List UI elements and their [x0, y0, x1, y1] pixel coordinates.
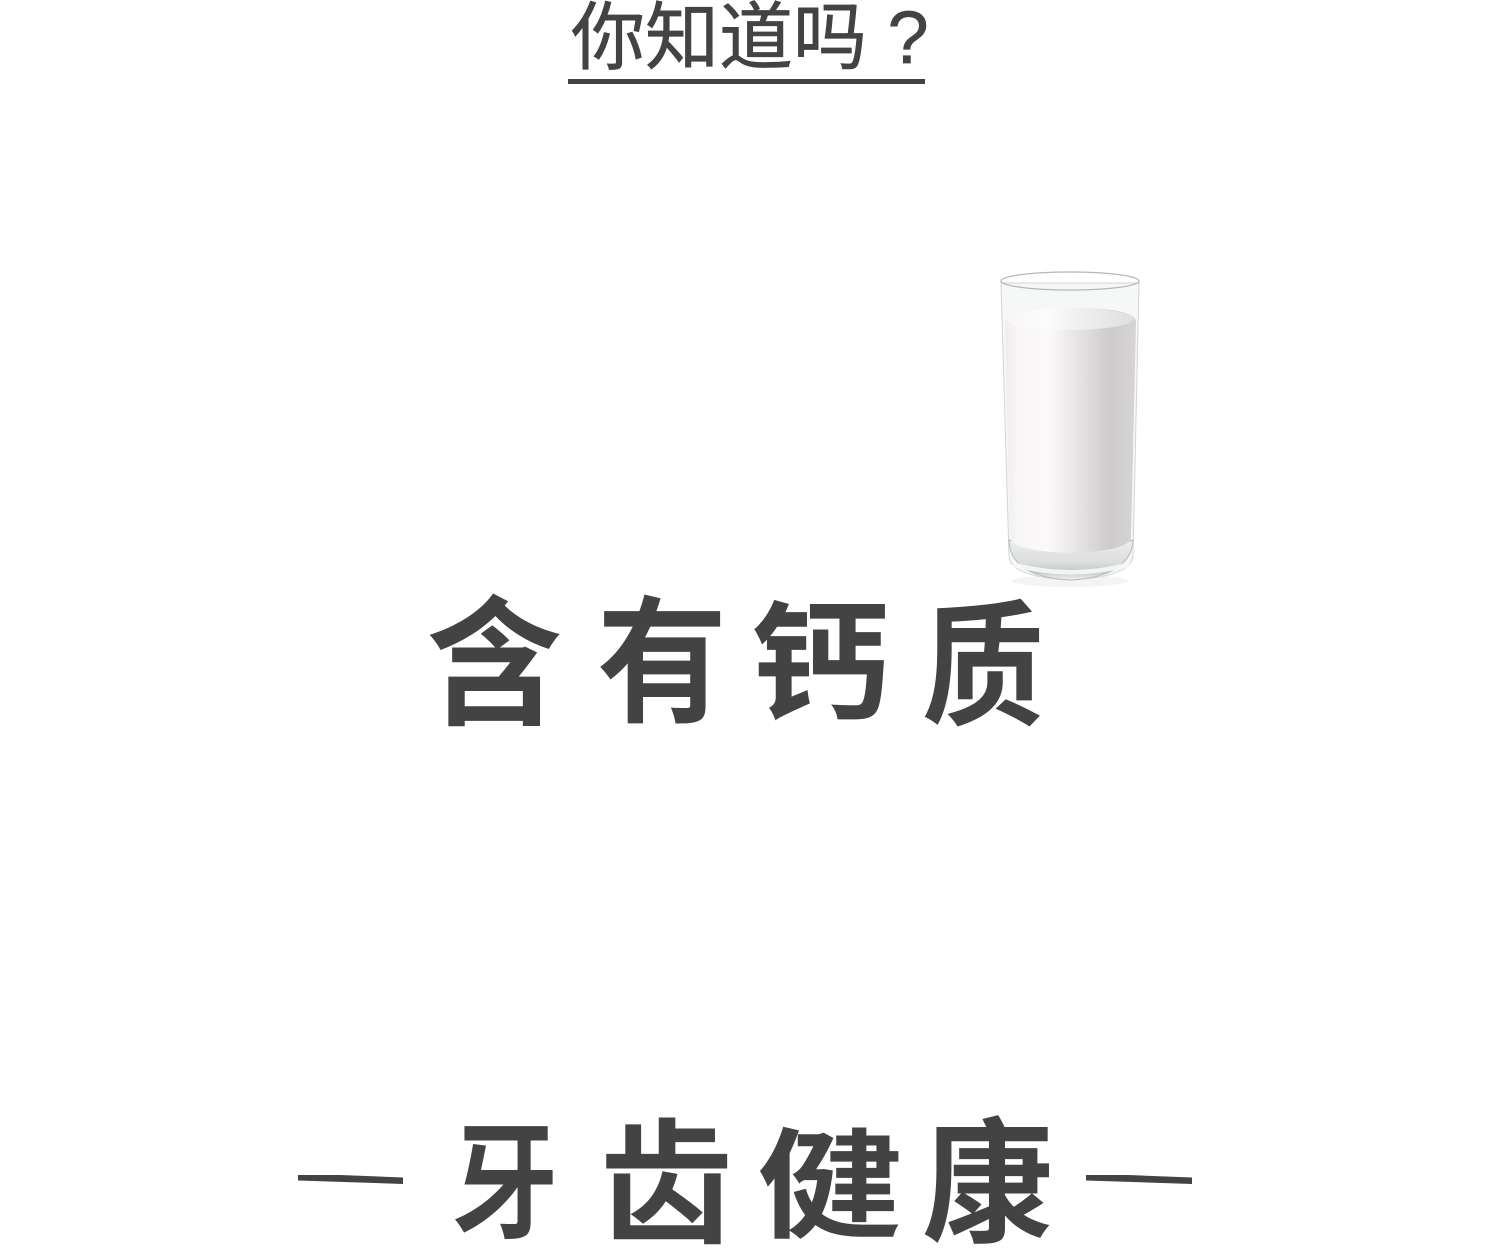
- heading underline: [568, 79, 925, 84]
- glass rim: [1001, 272, 1139, 290]
- text: contains calcium: 钙: [750, 592, 889, 737]
- illustration: glass of milk: [1000, 271, 1140, 587]
- milk: [1005, 308, 1136, 553]
- text: contains calcium: 有: [597, 587, 727, 741]
- glass shadow: [1012, 575, 1128, 587]
- glass body: [1001, 283, 1139, 580]
- left dash: [298, 1174, 403, 1184]
- right dash: [1086, 1174, 1192, 1184]
- text: contains calcium: 质: [922, 592, 1044, 744]
- text: contains calcium: 含: [427, 586, 562, 744]
